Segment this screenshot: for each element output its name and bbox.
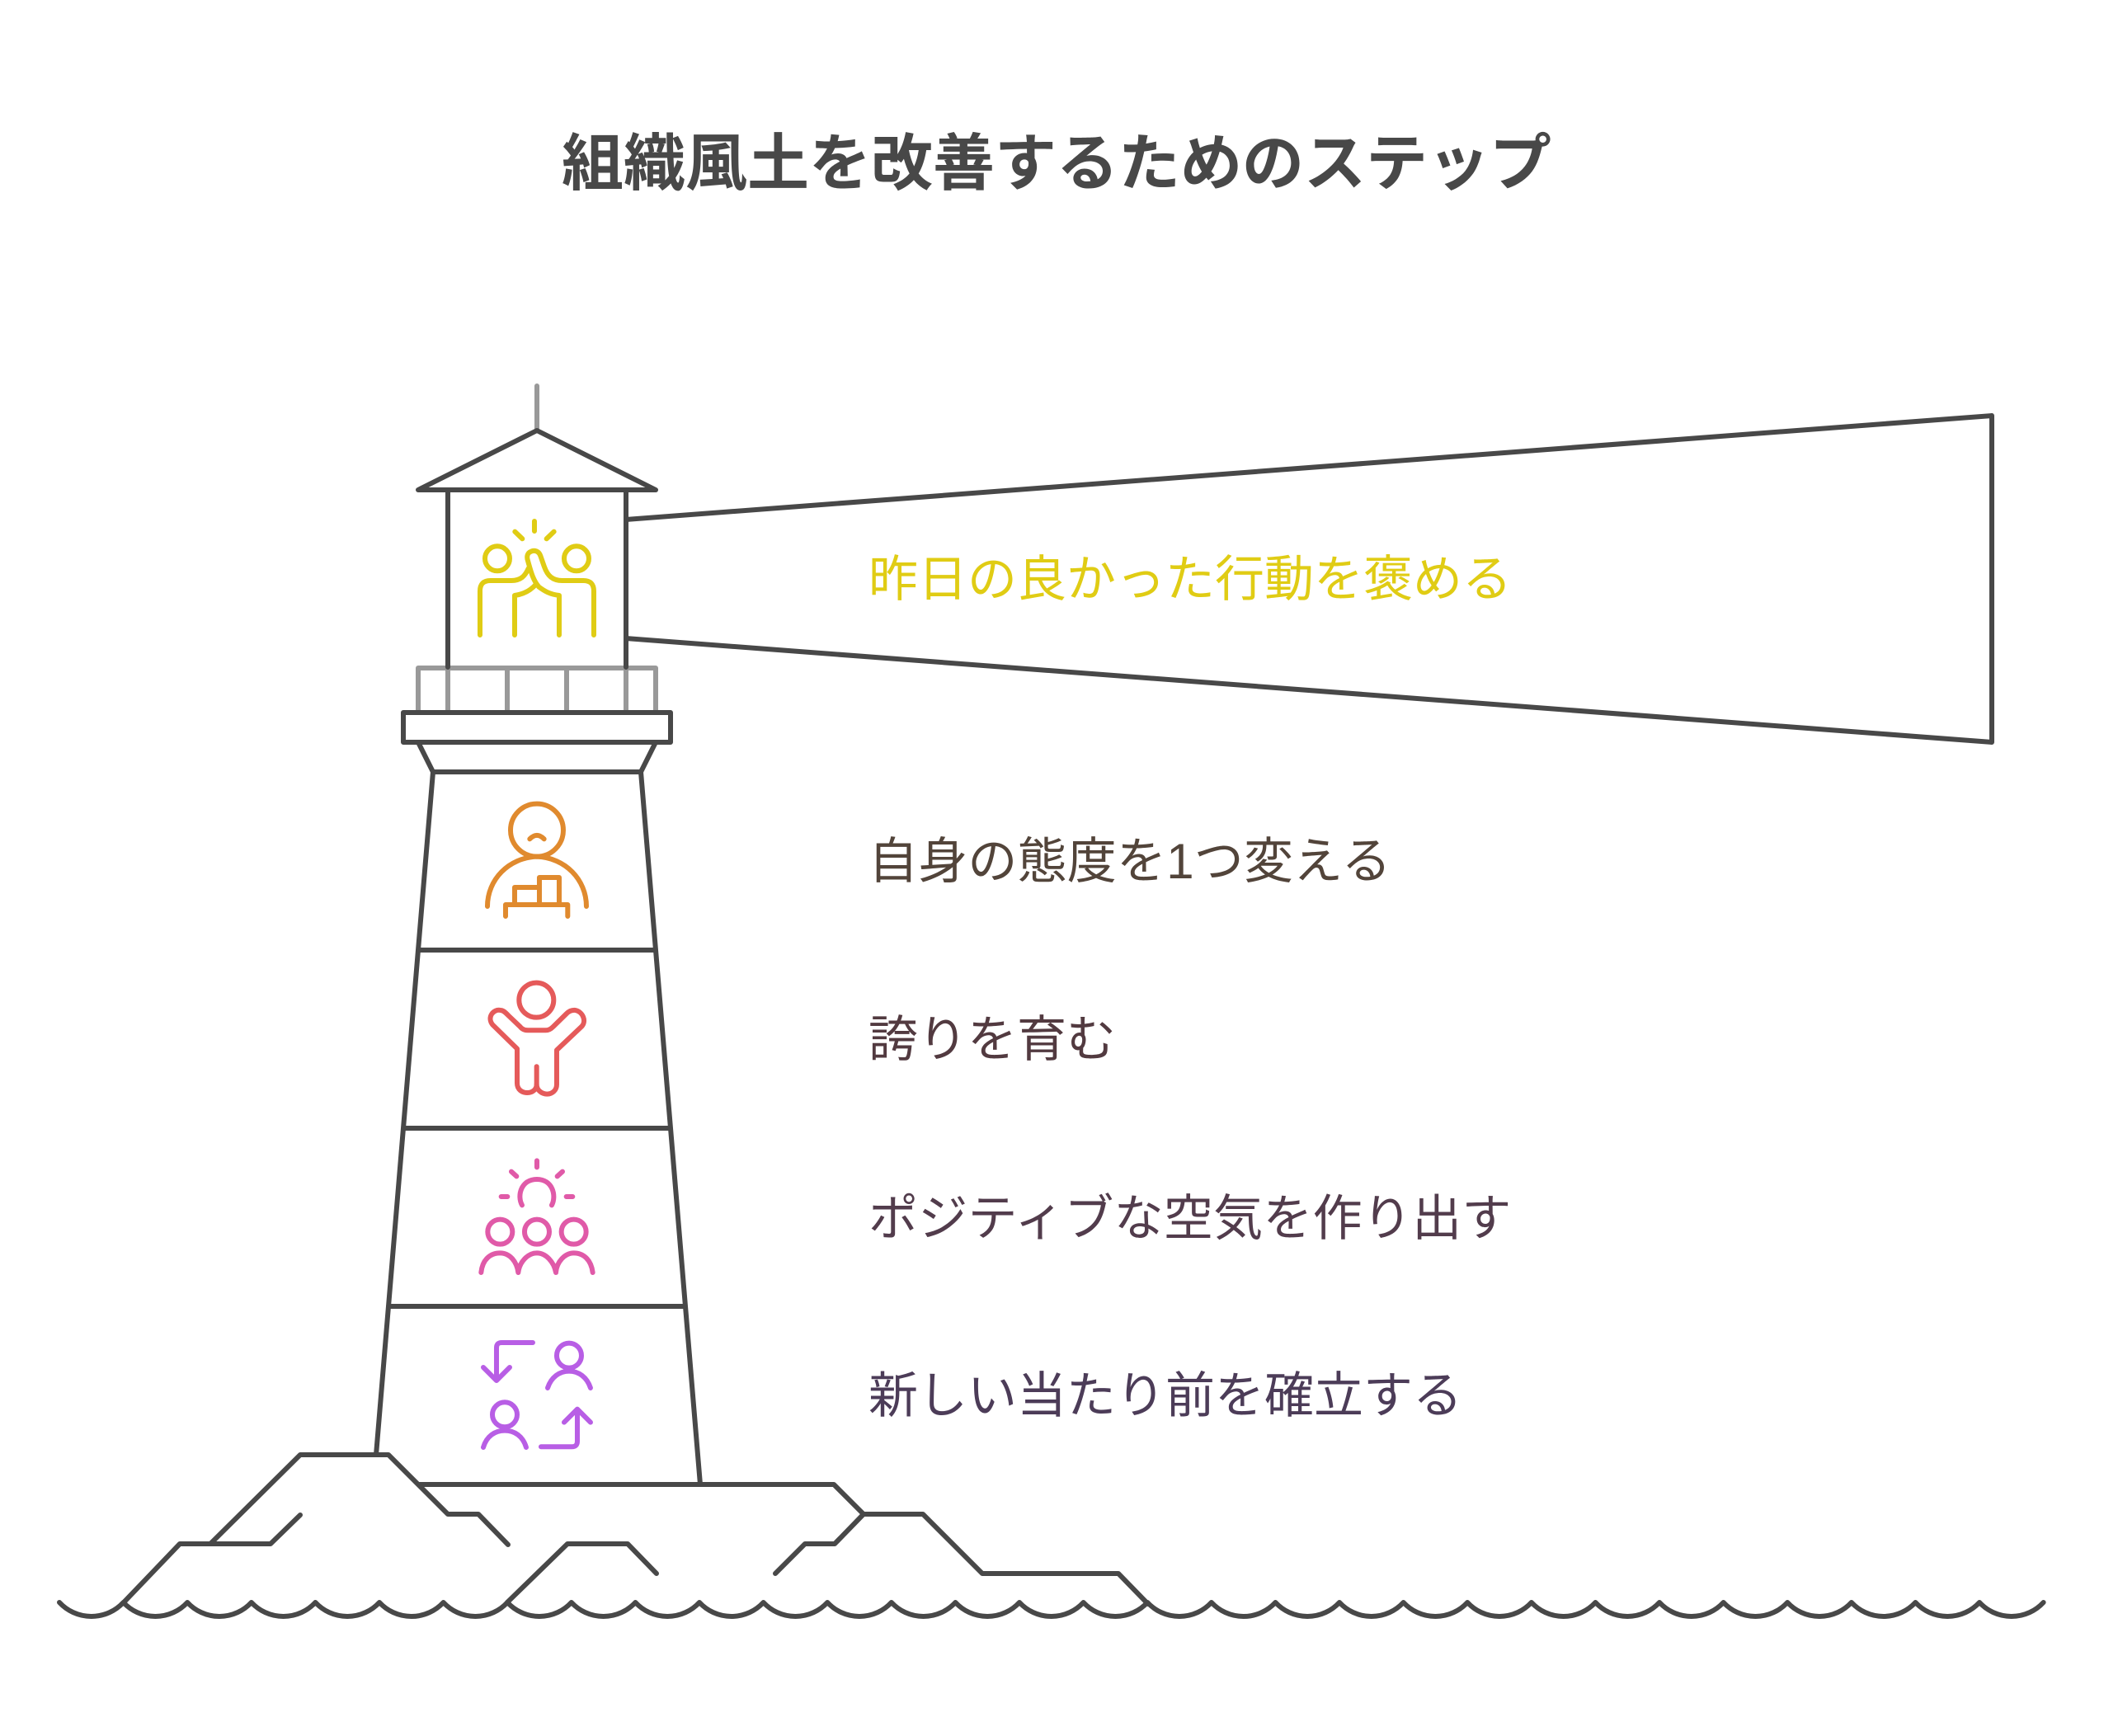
step label 3: 誇りを育む: [868, 1012, 1116, 1067]
collar: [418, 742, 656, 772]
railing: [418, 668, 656, 712]
title: 組織風土を改善するためのステップ: [562, 129, 1551, 198]
step label 5: 新しい当たり前を確立する: [868, 1368, 1462, 1423]
rock ledge: [419, 1484, 1148, 1604]
rock left: [124, 1455, 508, 1602]
icon: person with blocks: [487, 804, 586, 916]
waves: [59, 1602, 2044, 1616]
icon: proud person arms raised: [490, 983, 584, 1094]
rocks: [124, 1455, 1148, 1604]
icon: high five: [480, 521, 594, 635]
step label 1: 昨日の良かった行動を褒める: [868, 552, 1512, 607]
lighthouse: [59, 386, 2044, 1616]
antenna: [534, 386, 539, 430]
lantern room: [448, 490, 626, 667]
gallery platform: [403, 713, 671, 742]
light beam: [626, 416, 1992, 742]
rock middle: [507, 1544, 657, 1602]
icon: people exchange arrows: [483, 1343, 591, 1447]
rock right: [775, 1514, 864, 1574]
icon: team under sun: [481, 1160, 593, 1273]
tower body: [376, 772, 700, 1484]
step label 4: ポジティブな空気を作り出す: [868, 1191, 1512, 1246]
step label 2: 自身の態度を1つ変える: [868, 834, 1391, 889]
roof: [418, 430, 656, 490]
